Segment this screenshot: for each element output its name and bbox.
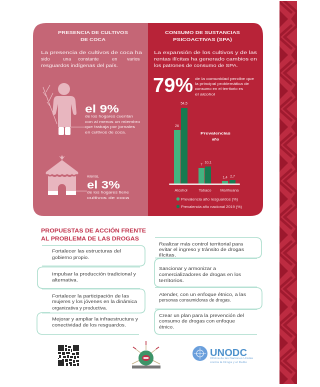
list: right column proposals: Atender, con un enfoque étnico, a las bbox=[159, 292, 247, 297]
panel: consumo de sustancias bbox=[148, 23, 263, 216]
heading: propuestas de acción: AL PROBLEMA DE LAS DROGAS bbox=[41, 236, 139, 242]
bar chart: prevalencias año: Tabaco bbox=[199, 188, 211, 192]
stat: 79%: 79% bbox=[153, 75, 193, 97]
stat: el 9%: con al menos un miembro bbox=[85, 120, 140, 124]
list: right column proposals: comercializadores de drogas en los bbox=[159, 272, 242, 277]
stat: el 3%: Además, bbox=[87, 174, 99, 178]
panel: presencia de cultivos de coca bbox=[33, 23, 148, 216]
chart legend bbox=[176, 197, 242, 209]
text: presencia intro: resguardos indígenas del país. bbox=[41, 63, 118, 69]
chart legend: Prevalencia año nacional 2019 (%) bbox=[181, 205, 242, 209]
list: right column proposals bbox=[154, 238, 262, 334]
heading: propuestas de acción bbox=[41, 226, 146, 242]
list: left column proposals: Mejorar y ampliar la infraestructura y bbox=[52, 316, 139, 322]
bar chart: prevalencias año: 7 bbox=[201, 162, 203, 166]
stat: el 9%: el 9% bbox=[85, 104, 119, 116]
heading: consumo de sustancias: CONSUMO DE SUSTANCIAS bbox=[165, 30, 241, 36]
list: right column proposals: evitar el ingreso y tránsito de drogas bbox=[159, 247, 245, 252]
bar chart: prevalencias año: Marihuana bbox=[220, 188, 240, 192]
list: left column proposals: Impulsar la producción tradicional y bbox=[52, 272, 137, 276]
list: left column proposals: organizativa y productiva. bbox=[52, 306, 107, 310]
list: right column proposals: Realizar más control territorial para bbox=[159, 242, 243, 246]
icon: traditional house bbox=[46, 155, 78, 195]
chart title: año bbox=[212, 136, 220, 142]
bar chart: prevalencias año: 1,4 bbox=[223, 176, 227, 180]
heading: consumo de sustancias bbox=[165, 30, 241, 43]
list: left column proposals bbox=[37, 246, 145, 334]
list: left column proposals: mujeres y los jóvenes en la dinámica bbox=[52, 299, 137, 304]
text: presencia intro bbox=[41, 50, 142, 69]
chart title: Prevalencias bbox=[200, 130, 231, 136]
bar chart: prevalencias año: 54,5 bbox=[181, 102, 187, 106]
list: left column proposals: gobierno propio. bbox=[52, 255, 89, 260]
text: presencia intro: una bbox=[63, 58, 71, 62]
list: right column proposals: étnico. bbox=[159, 324, 174, 330]
logo: UNODC bbox=[192, 346, 254, 364]
list: left column proposals: conectividad de los resguardos. bbox=[52, 322, 126, 328]
bar chart: prevalencias año: 10,1 bbox=[205, 160, 211, 164]
heading: propuestas de acción: PROPUESTAS DE ACCIÓN FRENTE bbox=[41, 226, 146, 234]
text: 79% description: de la comunidad percibe que bbox=[195, 77, 254, 81]
text: consumo intro: rentas ilícitas ha generado cambios en bbox=[154, 56, 257, 62]
text: 79% description bbox=[195, 77, 254, 96]
text: consumo intro bbox=[154, 50, 258, 69]
list: right column proposals: Crear un plan para la prevención del bbox=[159, 313, 244, 318]
logo: UNODC: Oficina de las Naciones Unidas bbox=[210, 356, 254, 360]
list: right column proposals: personas consumidoras de drogas. bbox=[159, 298, 231, 302]
text: 79% description: consumo en el territorio es bbox=[195, 87, 243, 91]
list: right column proposals: Sancionar y armonizar a bbox=[159, 266, 216, 271]
text: presencia intro: La presencia de cultivos de coca ha bbox=[41, 50, 142, 56]
stat: el 9%: en cultivos de coca. bbox=[85, 130, 126, 134]
text: consumo intro: los patrones de consumo de SPA. bbox=[154, 63, 238, 69]
stat: el 3%: cultivos de coca bbox=[87, 196, 130, 200]
heading: presencia de cultivos: PRESENCIA DE CULTIVOS bbox=[58, 30, 129, 36]
list: left column proposals: Fortalecer las estructuras del bbox=[52, 248, 121, 254]
text: consumo intro: La expansión de los cultivos y de las bbox=[154, 50, 258, 56]
bar chart: prevalencias año bbox=[169, 102, 242, 209]
list: left column proposals: Fortalecer la participación de las bbox=[52, 294, 130, 298]
stat: el 3%: de los hogares tiene bbox=[87, 190, 129, 194]
stat: el 9%: de los hogares cuentan bbox=[85, 114, 133, 118]
text: 79% description: el alcohol bbox=[195, 92, 215, 96]
text: 79% description: la principal problemática de bbox=[195, 82, 249, 86]
bar chart: prevalencias año: 2,7 bbox=[230, 174, 235, 178]
text: presencia intro: constante bbox=[78, 56, 99, 62]
list: right column proposals: ilícitas. bbox=[159, 252, 176, 258]
stat: el 9% bbox=[71, 104, 140, 134]
bar chart: prevalencias año: Alcohol bbox=[175, 188, 188, 192]
text: presencia intro: sido bbox=[41, 56, 50, 62]
logo: UNODC: contra la Droga y el Delito bbox=[210, 360, 248, 364]
list: left column proposals: alternativa. bbox=[52, 278, 78, 282]
list: right column proposals: consumo de drogas con enfoque bbox=[159, 318, 235, 324]
bar chart: prevalencias año: 26 bbox=[175, 124, 179, 128]
chart title bbox=[200, 130, 231, 142]
text: presencia intro: en bbox=[112, 58, 118, 62]
heading: consumo de sustancias: PSICOACTIVAS (SPA) bbox=[173, 37, 232, 43]
logo: indigenous emblem bbox=[132, 341, 160, 368]
text: presencia intro: varios bbox=[127, 56, 140, 62]
heading: presencia de cultivos bbox=[58, 30, 129, 43]
list: right column proposals: territorios. bbox=[159, 278, 184, 283]
logo: UNODC: UNODC bbox=[210, 348, 247, 359]
chart legend: Prevalencia año resguardos (%) bbox=[181, 197, 238, 201]
decorative side strip bbox=[280, 1, 297, 384]
icon: QR code bbox=[58, 345, 79, 366]
stat: el 3% bbox=[76, 174, 130, 200]
stat: el 3%: el 3% bbox=[87, 180, 120, 192]
heading: presencia de cultivos: DE COCA bbox=[80, 37, 106, 43]
icon: person with coca plant bbox=[43, 83, 76, 135]
stat: el 9%: que trabaja por jornales bbox=[85, 125, 135, 129]
